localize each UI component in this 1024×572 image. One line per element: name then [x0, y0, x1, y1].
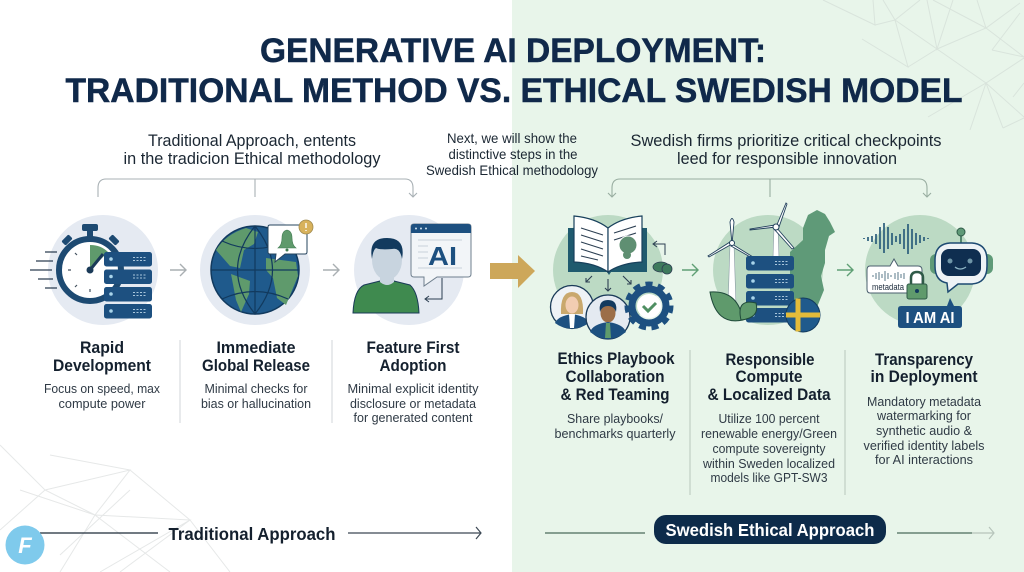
gear with check	[627, 284, 671, 328]
team member: woman	[550, 286, 594, 329]
intro: swedish approach: leed for responsible innovation	[677, 149, 897, 168]
step: transparency in deployment	[864, 351, 985, 467]
step: immediate global release: bias or hallucination	[201, 396, 311, 411]
step: transparency in deployment: verified identity labels	[864, 438, 985, 453]
step: immediate global release: Global Release	[202, 357, 310, 375]
icon: transparency with robot	[864, 215, 993, 328]
footer: swedish ethical approach: Swedish Ethical Approach	[666, 520, 874, 540]
metadata bubble: metadata	[872, 282, 904, 292]
robot	[930, 228, 993, 292]
intro: traditional approach	[124, 131, 381, 168]
logo badge: F	[18, 533, 32, 558]
step: responsible compute: Responsible	[726, 351, 814, 369]
footer: swedish ethical approach	[545, 515, 994, 544]
step: feature first adoption	[348, 339, 479, 425]
step: feature first adoption: Minimal explicit identity	[348, 381, 479, 396]
step: rapid development: Development	[53, 357, 151, 375]
step: rapid development: Focus on speed, max	[44, 381, 160, 396]
step: rapid development: Rapid	[80, 339, 124, 357]
step: transparency in deployment: for AI interactions	[875, 452, 973, 467]
step: responsible compute: & Localized Data	[708, 386, 831, 404]
step: transparency in deployment: in Deployment	[870, 368, 978, 386]
intro: swedish approach: Swedish firms prioritize critical checkpoints	[630, 131, 942, 150]
step: responsible compute: within Sweden localized	[702, 456, 835, 471]
step: ethics playbook: Ethics Playbook	[558, 350, 675, 368]
step: transparency in deployment: synthetic audio &	[876, 423, 972, 438]
logo badge	[6, 526, 44, 564]
step: responsible compute: renewable energy/Green	[701, 426, 837, 441]
intro: transition note: Swedish Ethical methodology	[426, 162, 598, 178]
bracket: traditional	[98, 179, 417, 197]
step: ethics playbook: & Red Teaming	[560, 386, 670, 404]
step: immediate global release: Immediate	[216, 339, 296, 357]
step: responsible compute: compute sovereignty	[712, 441, 826, 456]
arrow	[837, 264, 853, 276]
title: TRADITIONAL METHOD VS. ETHICAL SWEDISH MODEL	[66, 72, 962, 110]
title	[66, 32, 962, 110]
step: ethics playbook: Collaboration	[566, 368, 664, 386]
intro: swedish approach	[630, 131, 942, 168]
I AM AI label: I AM AI	[906, 310, 954, 327]
icon: swedish flag	[786, 298, 820, 332]
footer: traditional approach: Traditional Approach	[168, 524, 336, 544]
step: ethics playbook	[554, 350, 676, 441]
icon: ethics playbook and team	[550, 215, 672, 339]
step: transparency in deployment: watermarking for	[876, 408, 972, 423]
step: rapid development	[44, 339, 160, 411]
step: immediate global release: Minimal checks for	[204, 381, 308, 396]
icon: person with AI window	[353, 215, 471, 325]
arrow	[682, 264, 698, 276]
footer: traditional approach	[40, 524, 481, 544]
intro: transition note: Next, we will show the	[447, 130, 577, 146]
intro: transition note	[426, 130, 598, 178]
intro: traditional approach: in the tradicion Ethical methodology	[124, 149, 381, 168]
title: GENERATIVE AI DEPLOYMENT:	[260, 32, 766, 70]
step: feature first adoption: disclosure or metadata	[350, 396, 477, 411]
arrow	[323, 264, 339, 276]
icon: person with AI window: AI	[428, 241, 457, 271]
step: feature first adoption: Feature First	[366, 339, 460, 357]
icon: renewable compute in Sweden	[708, 203, 835, 332]
bracket: swedish	[608, 179, 931, 197]
step: responsible compute: Utilize 100 percent	[718, 411, 820, 426]
step: immediate global release	[201, 339, 311, 411]
step: responsible compute	[701, 351, 837, 485]
arrow	[170, 264, 186, 276]
step: responsible compute: Compute	[736, 368, 802, 386]
step: feature first adoption: Adoption	[380, 357, 446, 375]
step: ethics playbook: benchmarks quarterly	[554, 426, 676, 441]
intro: transition note: distinctive steps in the	[448, 146, 578, 162]
icon: globe with alert	[200, 215, 313, 325]
step: responsible compute: models like GPT-SW3	[710, 470, 828, 485]
step: transparency in deployment: Mandatory metadata	[867, 394, 982, 409]
lock	[907, 272, 927, 299]
step: rapid development: compute power	[58, 396, 146, 411]
team member: man	[586, 295, 630, 339]
arrow: gold transition	[490, 255, 535, 288]
step: transparency in deployment: Transparency	[875, 351, 974, 369]
icon: stopwatch and servers	[30, 215, 158, 325]
step: ethics playbook: Share playbooks/	[567, 411, 663, 426]
intro: traditional approach: Traditional Approach, entents	[148, 131, 356, 150]
step: feature first adoption: for generated content	[354, 410, 473, 425]
